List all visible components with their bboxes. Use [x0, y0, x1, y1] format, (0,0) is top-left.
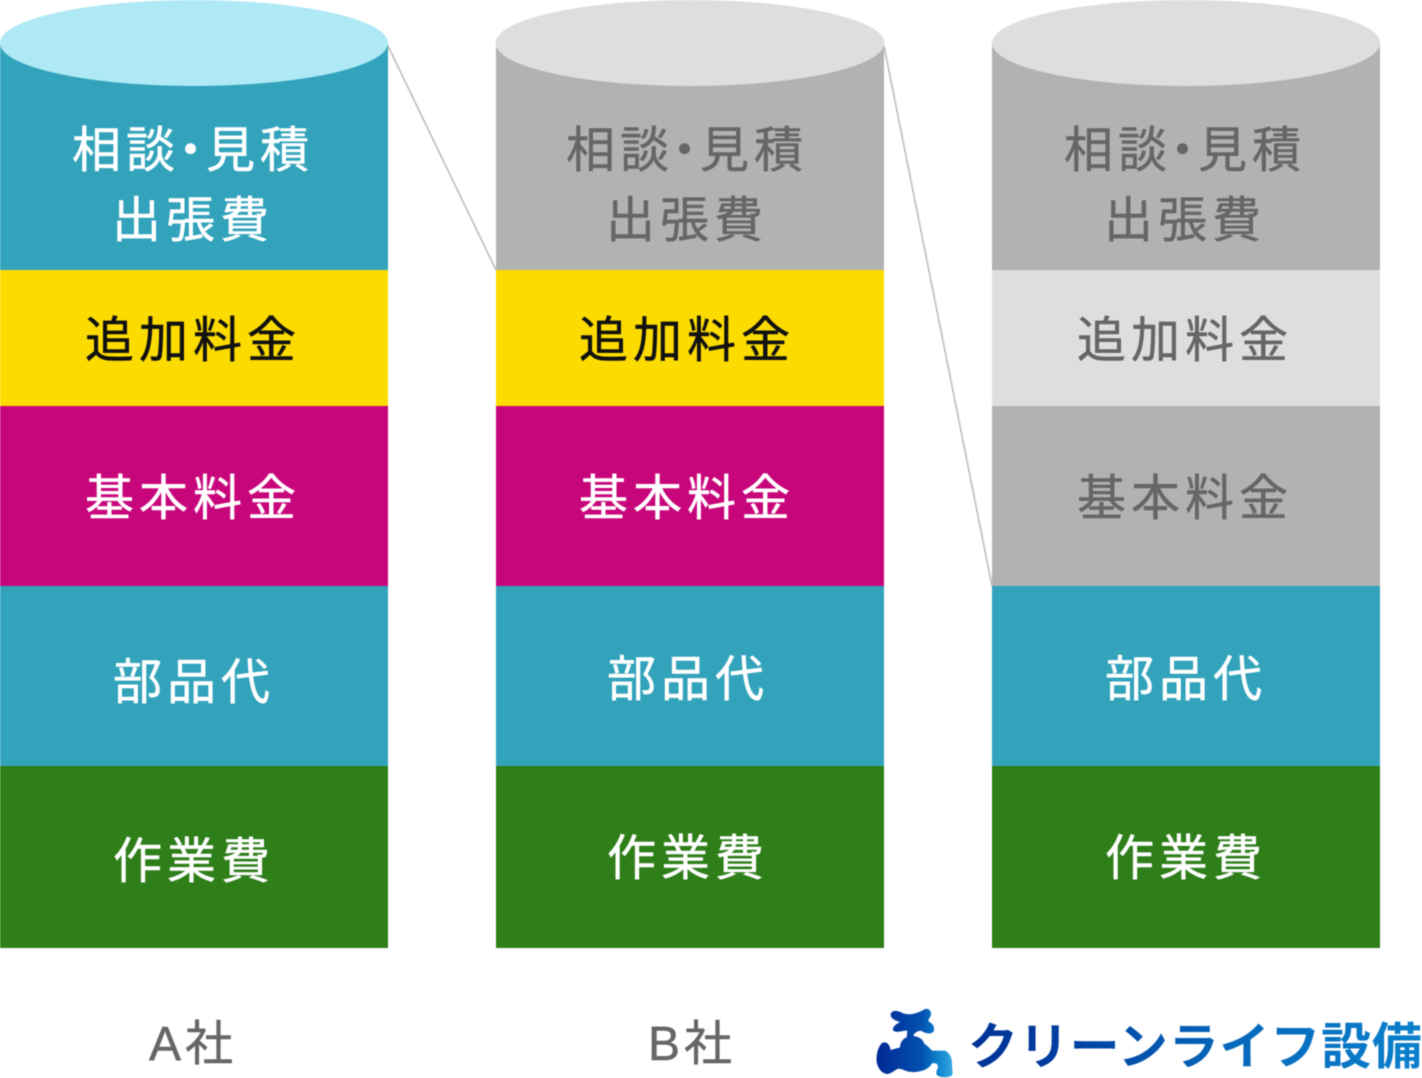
segment: 基本料金: 基本料金	[579, 472, 795, 526]
logo: クリーンライフ設備	[877, 1009, 1422, 1077]
segment: 作業費: 作業費	[607, 832, 769, 886]
segment: 作業費: 作業費	[1105, 832, 1267, 886]
label: A社: A社	[149, 1018, 237, 1071]
segment: 相談・見積 出張費: 出張費	[1104, 194, 1266, 248]
segment: 作業費	[992, 766, 1380, 948]
segment: 相談・見積 出張費	[992, 0, 1380, 270]
segment: 部品代	[496, 586, 884, 766]
segment: 基本料金	[992, 406, 1380, 586]
segment: 追加料金: 追加料金	[1077, 314, 1293, 368]
segment: 追加料金	[0, 270, 388, 406]
segment: 部品代	[0, 586, 388, 766]
segment: 部品代: 部品代	[113, 656, 275, 710]
segment: 追加料金	[992, 270, 1380, 406]
segment: 部品代	[992, 586, 1380, 766]
segment: 基本料金: 基本料金	[1077, 472, 1293, 526]
segment: 相談・見積 出張費	[496, 0, 884, 270]
segment: 追加料金: 追加料金	[579, 314, 795, 368]
column: クリーンライフ設備	[992, 0, 1380, 948]
segment: 基本料金	[496, 406, 884, 586]
column: B社	[496, 0, 884, 948]
segment: 相談・見積 出張費: 出張費	[606, 194, 768, 248]
segment: 追加料金: 追加料金	[85, 314, 301, 368]
segment: 基本料金: 基本料金	[85, 472, 301, 526]
logo text: クリーンライフ設備	[968, 1019, 1422, 1075]
segment: 基本料金	[0, 406, 388, 586]
column: A社	[0, 0, 388, 948]
connector line: B to Clean Life	[884, 46, 992, 586]
segment: 相談・見積 出張費: 相談・見積	[566, 124, 808, 178]
icon: water faucet	[877, 1009, 953, 1077]
segment: 作業費	[0, 766, 388, 948]
segment: 部品代: 部品代	[607, 653, 769, 707]
label: B社: B社	[648, 1018, 736, 1071]
segment: 部品代: 部品代	[1105, 653, 1267, 707]
segment: 相談・見積 出張費	[0, 0, 388, 270]
segment: 作業費: 作業費	[113, 835, 275, 889]
segment: 相談・見積 出張費: 相談・見積	[72, 124, 314, 178]
segment: 追加料金	[496, 270, 884, 406]
segment: 相談・見積 出張費: 出張費	[112, 194, 274, 248]
segment: 相談・見積 出張費: 相談・見積	[1064, 124, 1306, 178]
segment: 作業費	[496, 766, 884, 948]
connector line: A to B	[388, 46, 496, 270]
